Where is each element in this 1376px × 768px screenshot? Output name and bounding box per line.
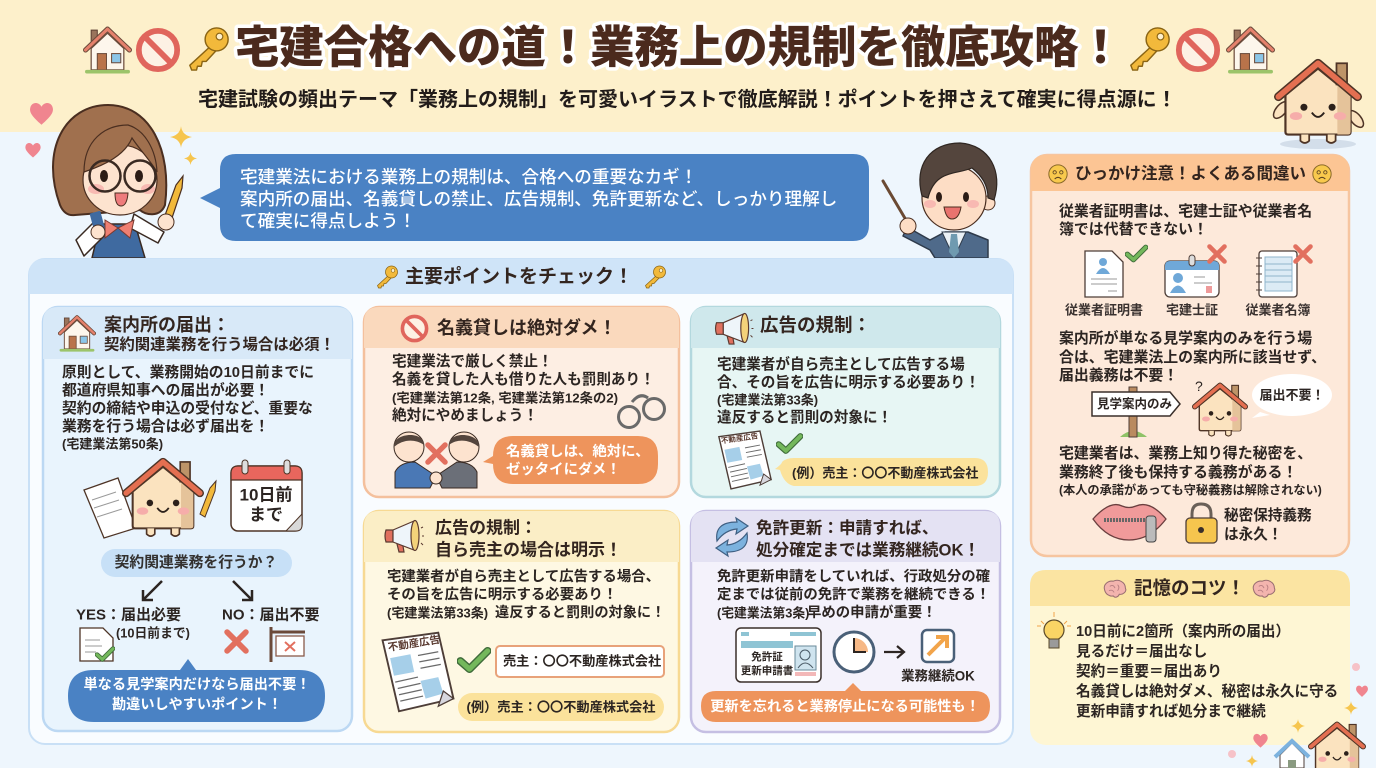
icon: check — [460, 651, 488, 669]
icon: signpost: 見学案内のみ — [1097, 396, 1172, 411]
panel: memory tips — [1030, 570, 1350, 745]
title: 宅建合格への道！業務上の規制を徹底攻略！ — [235, 24, 1123, 72]
text: 秘密保持 — [1059, 444, 1322, 497]
icon: newspaper: 不動産広告 — [720, 430, 759, 445]
title row — [85, 24, 1273, 73]
icon: megaphone — [385, 520, 424, 552]
card body text: 都道府県知事への届出が必要！ — [62, 381, 269, 399]
text: 見学案内 — [1059, 329, 1326, 384]
card body text: 名義を貸した人も借りた人も罰則あり！ — [392, 370, 655, 388]
icon: calendar 10日前まで: まで — [249, 506, 283, 524]
card: 案内所の届出 — [43, 307, 352, 731]
icon: light bulb — [1037, 612, 1071, 648]
panel: main points — [29, 259, 1013, 744]
card body text: (宅建業法第33条) — [717, 392, 818, 408]
yes branch: (10日前まで) — [116, 626, 190, 640]
text: 秘密保持義務は永久: は永久！ — [1224, 525, 1282, 543]
icon: house — [60, 317, 94, 352]
decorations: bottom right houses — [1228, 663, 1368, 768]
example pill — [775, 458, 988, 486]
tips list: 名義貸しは絶対ダメ、秘密は永久に守る — [1076, 682, 1338, 700]
text: 見学案内: 合は、宅建業法上の案内所に該当せず、 — [1059, 348, 1326, 366]
card body text — [717, 567, 990, 621]
icon: key left — [190, 28, 228, 70]
card: 名義貸しは絶対ダメ — [364, 307, 679, 497]
illustration: male teacher — [883, 143, 997, 258]
icon: employee certificate: 従業者証明書 — [1065, 302, 1143, 318]
arrow: yes — [143, 581, 162, 600]
card heading: 名義貸しは絶対ダメ！ — [437, 317, 616, 338]
illustration: renewal form: 免許証 — [751, 650, 783, 663]
tips list — [1076, 622, 1338, 720]
illustration: worried house: ? — [1195, 378, 1203, 394]
example pill: (例）売主：〇〇不動産株式会社 — [466, 698, 656, 714]
card body text: 宅建業者が自ら売主として広告する場合、 — [387, 567, 660, 585]
icon: employee roster — [1245, 246, 1311, 318]
card heading: 案内所の届出： — [104, 315, 230, 335]
callout: ダメ: ゼッタイにダメ！ — [506, 460, 621, 478]
card body text — [392, 352, 655, 424]
icon: signpost — [1092, 387, 1180, 437]
illustration: worried house — [1195, 378, 1245, 436]
panel heading — [1104, 578, 1275, 598]
tips list: 10日前に2箇所（案内所の届出） — [1076, 622, 1290, 640]
callout: intro speech bubble: 案内所の届出、名義貸しの禁止、広告規制、免許更新など、しっかり理解し — [240, 189, 837, 209]
card: 広告の規制 自ら売主 — [364, 511, 679, 732]
illustration: handshake with cross — [394, 432, 479, 488]
text: 従業者証明書: 簿では代替できない！ — [1059, 220, 1208, 238]
card: 案内所の届出: 契約関連業務を行う場合は必須！ — [104, 334, 335, 354]
card body text: 絶対にやめましょう！ — [392, 406, 538, 424]
seller label box: 売主：〇〇不動産株式会社 — [503, 652, 661, 668]
card body text: 違反すると罰則の対象に！ — [717, 408, 892, 426]
icon: newspaper — [719, 430, 771, 489]
card heading: 広告の規制： — [435, 518, 537, 538]
card body text: 業務を行う場合は必ず届出を！ — [62, 417, 269, 435]
yes branch: YES：届出必要 — [76, 606, 181, 624]
text: 見学案内: 案内所が単なる見学案内のみを行う場 — [1059, 329, 1312, 347]
card body text: 契約の締結や申込の受付など、重要な — [62, 399, 313, 417]
icon: license card — [1165, 246, 1224, 318]
card body text: 宅建業者が自ら売主として広告する場 — [717, 355, 965, 373]
card body text: 免許更新申請をしていれば、行政処分の確 — [717, 567, 990, 585]
subtitle: 宅建試験の頻出テーマ「業務上の規制」を可愛いイラストで徹底解説！ポイントを押さえて確実に得点源に！ — [198, 88, 1177, 111]
callout: ダメ — [483, 436, 658, 484]
card body text: (宅建業法第3条) — [717, 606, 809, 620]
yes branch — [76, 606, 190, 661]
illustration: renewal form — [736, 628, 821, 682]
callout: 更新 — [701, 683, 990, 722]
decision pill — [101, 549, 292, 577]
icon: calendar 10日前まで: 10日前 — [240, 486, 292, 504]
panel heading band — [29, 259, 1013, 294]
card body text: その旨を広告に明示する必要あり！ — [387, 585, 617, 603]
card: 免許更新 — [691, 511, 1000, 732]
icon: clock — [834, 632, 874, 672]
callout: 更新: 更新を忘れると業務停止になる可能性も！ — [710, 698, 980, 715]
card body text — [62, 363, 314, 452]
icon: padlock — [1186, 504, 1217, 543]
card: 広告の規制 — [691, 307, 1000, 497]
card: 免許更新: 処分確定までは業務継続OK！ — [756, 540, 980, 560]
illustration: renewal form: 更新申請書 — [741, 664, 793, 677]
icon: newspaper: 不動産広告 — [387, 633, 441, 654]
icon: continue arrow box — [922, 630, 954, 662]
text: 秘密保持: (本人の承諾があっても守秘義務は解除されない) — [1059, 482, 1322, 497]
icon: prohibition left — [139, 31, 177, 69]
card body text: (宅建業法第33条) — [387, 606, 488, 620]
callout: 見学案内: 勘違いしやすいポイント！ — [112, 696, 282, 713]
tips list: 見るだけ＝届出なし — [1076, 643, 1207, 660]
tips list: 更新申請すれば処分まで継続 — [1076, 703, 1266, 720]
card body text: 合、その旨を広告に明示する必要あり！ — [717, 373, 980, 391]
panel heading: ひっかけ注意！よくある間違い — [1075, 163, 1306, 183]
card body text: 定までは従前の免許で業務を継続できる！ — [717, 585, 990, 603]
icon: key right — [1131, 28, 1169, 70]
card body text: (宅建業法第50条) — [62, 436, 163, 452]
text: 従業者証明書 — [1059, 202, 1312, 238]
callout: intro speech bubble: て確実に得点しよう！ — [240, 211, 416, 231]
example pill: (例）売主：〇〇不動産株式会社 — [792, 466, 978, 480]
text: 秘密保持義務は永久: 秘密保持義務 — [1224, 507, 1312, 524]
card heading: 広告の規制： — [760, 314, 871, 336]
icon: license card: 宅建士証 — [1166, 302, 1218, 318]
text: 秘密保持: 業務終了後も保持する義務がある！ — [1059, 463, 1297, 481]
text: 秘密保持: 宅建業者は、業務上知り得た秘密を、 — [1059, 444, 1312, 462]
icon: employee roster: 従業者名簿 — [1245, 302, 1311, 318]
icon: megaphone — [716, 313, 753, 344]
mascot: house top right — [1271, 63, 1366, 149]
panel heading: 記憶のコツ！ — [1134, 578, 1245, 598]
bubble: 届出不要: 届出不要！ — [1259, 388, 1325, 402]
header band — [0, 0, 1376, 132]
card body text: (宅建業法第12条, 宅建業法第12条の2) — [392, 390, 618, 406]
decision pill: 契約関連業務を行うか？ — [115, 553, 277, 571]
callout: ダメ: 名義貸しは、絶対に、 — [506, 442, 649, 460]
card body text: 原則として、業務開始の10日前までに — [62, 363, 314, 381]
arrow: no — [233, 581, 252, 600]
text: 秘密保持義務は永久 — [1224, 507, 1312, 543]
icon: house left — [85, 29, 130, 73]
seller label box — [496, 646, 664, 677]
bubble: 届出不要 — [1252, 374, 1332, 418]
icon: employee certificate — [1065, 247, 1146, 318]
card body text — [387, 567, 665, 621]
icon: prohibition — [402, 316, 427, 341]
card body text: 宅建業法で厳しく禁止！ — [392, 352, 553, 370]
icon: newspaper — [383, 633, 453, 711]
no branch — [222, 606, 320, 662]
tips list: 契約＝重要＝届出あり — [1076, 662, 1222, 680]
panel heading: 主要ポイントをチェック！ — [405, 264, 633, 288]
card: 広告の規制 自ら売主: 自ら売主の場合は明示！ — [435, 540, 622, 560]
panel: common mistakes — [1031, 155, 1349, 556]
illustration: house with document — [84, 462, 216, 538]
text: 従業者証明書: 従業者証明書は、宅建士証や従業者名 — [1059, 202, 1312, 220]
text: 見学案内: 届出義務は不要！ — [1059, 367, 1178, 384]
card body text: 違反すると罰則の対象に！ — [495, 604, 665, 621]
callout: 見学案内: 単なる見学案内だけなら届出不要！ — [83, 676, 311, 693]
card body text: 早めの申請が重要！ — [807, 603, 937, 621]
icon: renew arrows — [716, 518, 748, 556]
no branch: NO：届出不要 — [222, 606, 320, 624]
label: 業務継続OK: 業務継続OK — [901, 668, 975, 684]
icon: check — [779, 436, 800, 451]
example pill — [458, 693, 664, 721]
icon: zipped lips — [1093, 505, 1166, 542]
icon: calendar 10日前まで — [231, 460, 302, 531]
icon: prohibition right — [1179, 31, 1217, 69]
icon: house right — [1228, 29, 1273, 73]
card body text — [717, 355, 980, 426]
callout: intro speech bubble: 宅建業法における業務上の規制は、合格への重要なカギ！ — [240, 167, 697, 187]
icon: handcuffs — [618, 396, 664, 428]
illustration: girl student — [25, 103, 197, 258]
callout: 見学案内 — [68, 659, 325, 722]
callout: intro speech bubble — [200, 154, 869, 241]
arrow — [884, 646, 904, 658]
card heading: 免許更新：申請すれば、 — [756, 518, 939, 538]
